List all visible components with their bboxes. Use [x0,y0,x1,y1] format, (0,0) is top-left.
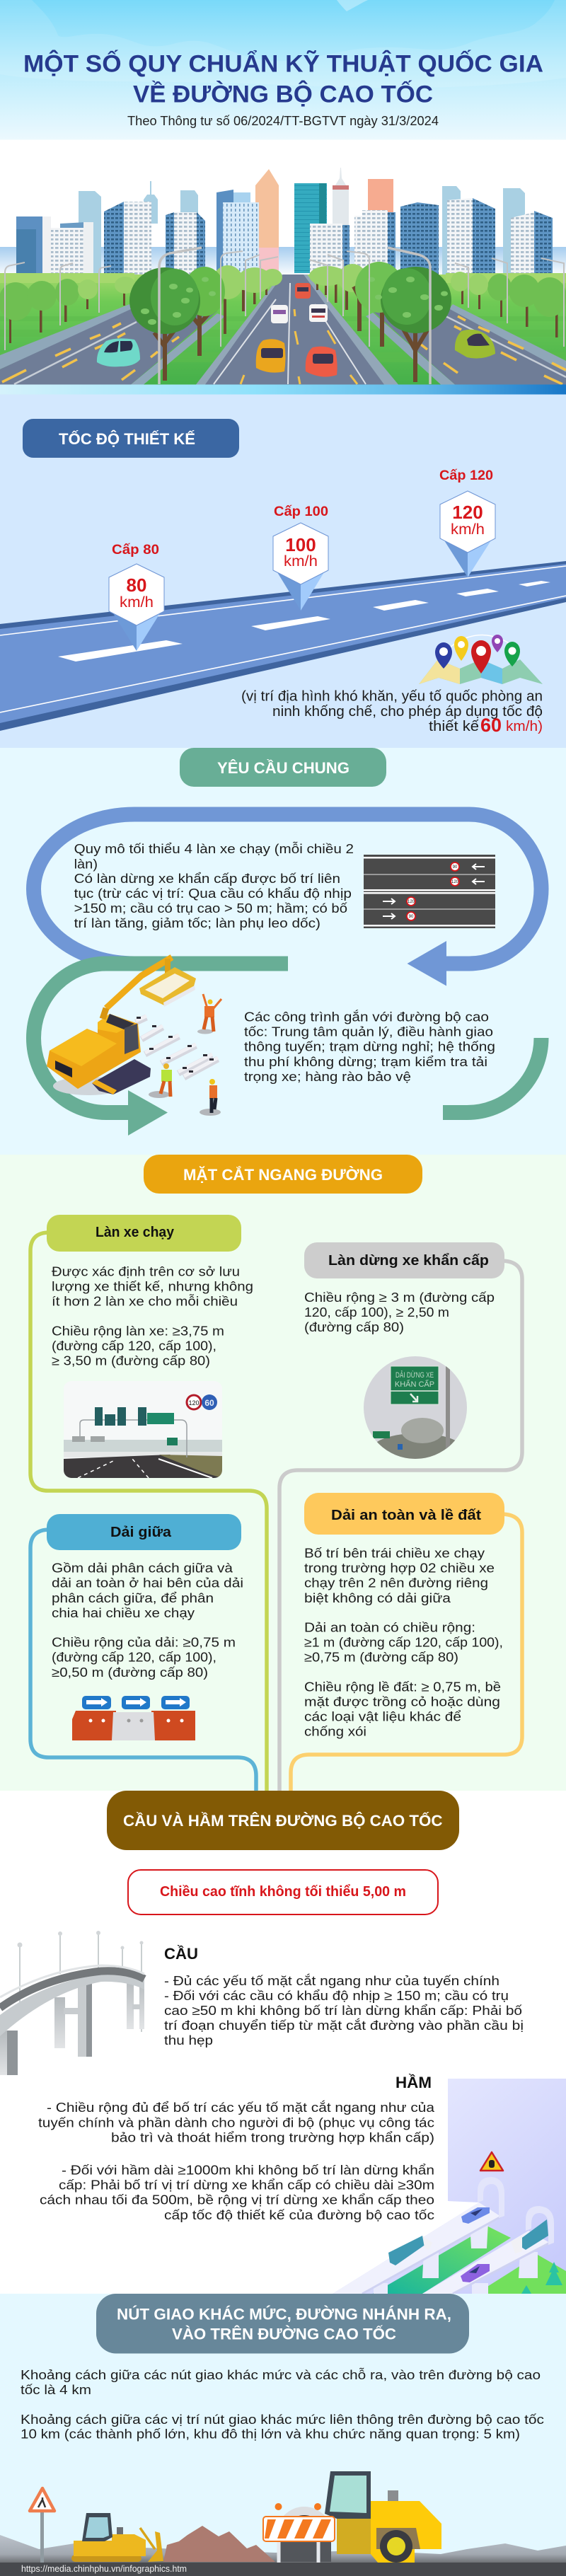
illustration: crane and workers [47,957,221,1116]
small bulldozer [71,2513,163,2562]
card: emergency lane [304,1242,504,1334]
car: blue [461,2207,490,2224]
diagram: road lanes: 90 [409,915,414,919]
blue arrow track [34,814,541,986]
heading: bridges and tunnels: CẦU VÀ HẦM TRÊN ĐƯỜNG BỘ CAO TỐC [123,1811,443,1830]
marker: cấp 100: km/h [284,553,318,570]
text: facilities: trọng xe; hàng rào bảo vệ [244,1069,411,1084]
note: terrain exception: 60 [480,715,502,736]
panel: bridges and tunnels [0,1791,566,2294]
panel: interchanges [0,2294,566,2576]
card: safety strip: chống xói [304,1724,366,1739]
section: tunnel text [38,2074,435,2222]
card: lane: ít hơn 2 làn xe cho mỗi chiều [52,1293,238,1308]
card: safety strip: chạy trên 2 nên đường riêng [304,1576,488,1590]
section: bridge text [164,1945,524,2047]
note: terrain exception: (vị trí địa hình khó khăn, yếu tố quốc phòng an [241,689,543,705]
text: facilities: thông tuyến; trạm dừng nghỉ; hệ thống [244,1039,495,1054]
diagram: road lanes: 120 [451,880,459,884]
panel: cross section [0,1155,566,1791]
icon: tunnel warning sign [480,2152,503,2171]
photo: expressway with gantry [64,1407,222,1478]
card: safety strip: biệt không có dải giữa [304,1590,451,1605]
photo: emergency sign: DẢI DỪNG XE [395,1370,434,1380]
subtitle: Theo Thông tư số 06/2024/TT-BGTVT ngày 31/3/2024 [127,114,439,128]
section: bridge text: trí đoạn chuyển tiếp từ mặt cắt đường vào phần cầu bị [164,2018,524,2033]
big trees [129,262,451,382]
card: safety strip: Chiều rộng lề đất: ≥ 0,75 m, bề [304,1680,501,1694]
title: VỀ ĐƯỜNG BỘ CAO TỐC [133,80,433,108]
callout: clearance [128,1870,438,1914]
card: safety strip: các loại vật liệu khác để [304,1709,461,1724]
text: distances: Khoảng cách giữa các vị trí nút giao khác mức liên thông trên đường bộ cao tốc [21,2412,544,2427]
marker: cấp 80: Cấp 80 [112,543,159,558]
text: distances: Khoảng cách giữa các nút giao khác mức và các chỗ ra, vào trên đường bộ cao [21,2367,541,2382]
outline: connectors [30,1232,522,1791]
green arrow track [34,964,541,1136]
icon: map with pins [419,635,543,684]
card: median: ≥0,50 m (đường cấp 80) [52,1665,208,1680]
section: bridge text: cao ≥50 m khi không bố trí làn dừng khẩn cấp: Phải bố [164,2003,522,2018]
card: median: phân cách giữa, để phân [52,1590,214,1605]
card: lane [47,1215,253,1368]
text: facilities: thu phí không dừng; trạm kiểm tra tải [244,1054,487,1069]
tree rows [0,264,566,343]
worker [149,1063,172,1098]
card: lane: lượng xe thiết kế, nhưng không [52,1278,253,1293]
heading: cross section: MẶT CẮT NGANG ĐƯỜNG [183,1166,383,1184]
heading: design speed: TỐC ĐỘ THIẾT KẾ [59,429,195,448]
marker: cấp 120: Cấp 120 [439,468,493,483]
note: terrain exception: thiết kế [429,719,479,734]
card: lane: Được xác định trên cơ sở lưu [52,1264,240,1278]
icon: speed signs: 60 [204,1398,214,1408]
heading: interchanges: NÚT GIAO KHÁC MỨC, ĐƯỜNG NHÁNH RA, [117,2305,451,2323]
panel: general requirements [0,748,566,1155]
central road [196,275,398,385]
section: bridge text: CẦU [164,1945,198,1963]
text: distances [21,2367,544,2442]
right road [373,304,566,385]
card: median: (đường cấp 120, cấp 100), [52,1650,216,1665]
car: purple [461,2264,490,2282]
text: lanes: Quy mô tối thiểu 4 làn xe chạy (mỗi chiều 2 [74,841,354,856]
text: lanes: Có làn dừng xe khẩn cấp được bố trí liên [74,871,340,886]
text: facilities: Các công trình gắn với đường bộ cao [244,1010,489,1024]
text: lanes: tục (trừ các vị trí: Qua cầu có khẩu độ nhịp [74,886,352,901]
illustration: tunnel [327,2079,566,2294]
note: terrain exception: ninh khống chế, cho phép áp dụng tốc độ [272,704,543,720]
road graphic [0,561,566,731]
footer: https://media.chinhphu.vn/infographics.htm [21,2563,187,2574]
text: facilities [244,1010,495,1084]
card: emergency lane: 120, cấp 100), ≥ 2,50 m [304,1305,449,1319]
text: distances: 10 km (các thành phố lớn, khu đô thị lớn và khu chức năng quan trọng: 5 km) [21,2427,520,2442]
panel: design speed [0,395,566,749]
road roller [263,2471,441,2563]
footer [0,2563,566,2576]
street lamps [5,248,564,384]
section: bridge text: - Đối với các cầu có khẩu độ nhịp ≥ 150 m; cầu có trụ [164,1988,509,2003]
marker: cấp 80 [109,543,164,651]
diagram: road lanes [364,855,495,928]
section: tunnel text: tuyến chính và phần dành cho người đi bộ (phục vụ công tác [38,2115,434,2130]
diagram: road lanes: 90 [453,865,458,870]
card: median: chia hai chiều xe chạy [52,1605,195,1620]
card: safety strip: mặt được trồng cỏ hoặc dùng [304,1694,500,1709]
card: median: Chiều rộng của dải: ≥0,75 m [52,1635,236,1650]
icon: speed signs: 120 [188,1399,200,1407]
text: lanes: >150 m; cầu có trụ cao > 50 m; hầm; có bố [74,901,347,916]
card: emergency lane: Chiều rộng ≥ 3 m (đường cấp [304,1290,495,1305]
photo: emergency sign [364,1356,467,1465]
text: distances: tốc là 4 km [21,2382,91,2397]
heading: interchanges [96,2294,469,2353]
diagram: road lanes: 120 [408,900,415,904]
text: lanes: làn) [74,856,98,872]
text: facilities: tốc: Trung tâm quản lý, điều hành giao [244,1024,493,1039]
card: emergency lane: (đường cấp 80) [304,1319,404,1334]
card: median [47,1514,243,1680]
worker [197,994,221,1034]
cars [97,283,495,377]
section: tunnel text: cấp: Phải bố trí vị trí dừng xe khẩn cấp có chiều dài ≥30m [59,2178,434,2193]
card: emergency lane: Làn dừng xe khẩn cấp [328,1253,489,1269]
card: lane: (đường cấp 120, cấp 100), [52,1338,216,1353]
note: terrain exception: km/h) [506,719,543,734]
marker: cấp 80: 80 [127,574,146,596]
left road [0,304,217,385]
icon: roadworks sign [30,2488,54,2563]
icon: speed signs [187,1394,217,1410]
marker: cấp 120: 120 [452,502,483,523]
note: terrain exception [241,689,543,736]
section: tunnel text: cấp tốc độ thiết kế của đường bộ cao tốc [164,2207,434,2222]
text: lanes: trí làn tăng, giảm tốc; làn phụ leo dốc) [74,916,320,930]
heading: design speed [23,419,239,458]
callout: clearance: Chiều cao tĩnh không tối thiểu 5,00 m [160,1884,406,1900]
text: lanes [74,841,354,930]
truck: left [388,2236,432,2265]
illustration: bridge [0,1931,144,2075]
section: tunnel text: HẦM [395,2074,432,2091]
heading: general requirements [180,748,386,787]
illustration: city and highway [0,140,566,385]
heading: cross section [144,1155,422,1194]
card: safety strip: Dải an toàn có chiều rộng: [304,1620,475,1635]
card: safety strip: Bố trí bên trái chiều xe chạy [304,1546,485,1561]
illustration: construction scene [0,2471,566,2563]
illustration: road barriers [72,1696,195,1740]
marker: cấp 100 [273,504,328,611]
gradient band [0,385,566,395]
heading: general requirements: YÊU CẦU CHUNG [217,759,350,777]
section: bridge text: thu hẹp [164,2033,213,2047]
section: tunnel text: bảo trì và thoát hiểm trong trường hợp khẩn cấp) [111,2130,434,2145]
photo: emergency sign: KHẨN CẤP [395,1380,434,1389]
heading: interchanges: VÀO TRÊN ĐƯỜNG CAO TỐC [172,2325,396,2343]
card: safety strip: ≥0,75 m (đường cấp 80) [304,1650,458,1665]
marker: cấp 120 [439,468,495,577]
section: bridge text: - Đủ các yếu tố mặt cắt ngang như của tuyến chính [164,1973,499,1988]
truck: right [511,2219,548,2253]
marker: cấp 100: Cấp 100 [274,504,328,519]
heading: bridges and tunnels [107,1791,459,1850]
card: lane: ≥ 3,50 m (đường cấp 80) [52,1353,210,1368]
marker: cấp 80: km/h [120,594,154,611]
section: tunnel text: - Chiều rộng đủ để bố trí các yếu tố mặt cắt ngang như của [47,2100,435,2115]
card: median: dải an toàn ở hai bên của dải [52,1576,243,1590]
card: lane: Làn xe chạy [96,1225,175,1240]
card: lane: Chiều rộng làn xe: ≥3,75 m [52,1323,224,1338]
title: MỘT SỐ QUY CHUẨN KỸ THUẬT QUỐC GIA [23,50,543,78]
card: median: Gồm dải phân cách giữa và [52,1561,233,1576]
card: safety strip [304,1493,504,1739]
panel: header [0,0,566,140]
card: safety strip: Dải an toàn và lề đất [331,1508,481,1523]
section: tunnel text: - Đối với hầm dài ≥1000m khi không bố trí làn dừng khẩn [62,2163,434,2178]
card: safety strip: ≥1 m (đường cấp 120, cấp 100), [304,1635,503,1650]
card: median: Dải giữa [110,1525,172,1540]
marker: cấp 120: km/h [451,521,485,538]
section: tunnel text: cách nhau tối đa 500m, bề rộng vị trí dừng xe khẩn cấp theo [40,2193,434,2207]
title [23,50,543,108]
marker: cấp 100: 100 [285,534,316,555]
card: safety strip: trong trường hợp 02 chiều xe [304,1561,495,1576]
worker [200,1079,221,1116]
